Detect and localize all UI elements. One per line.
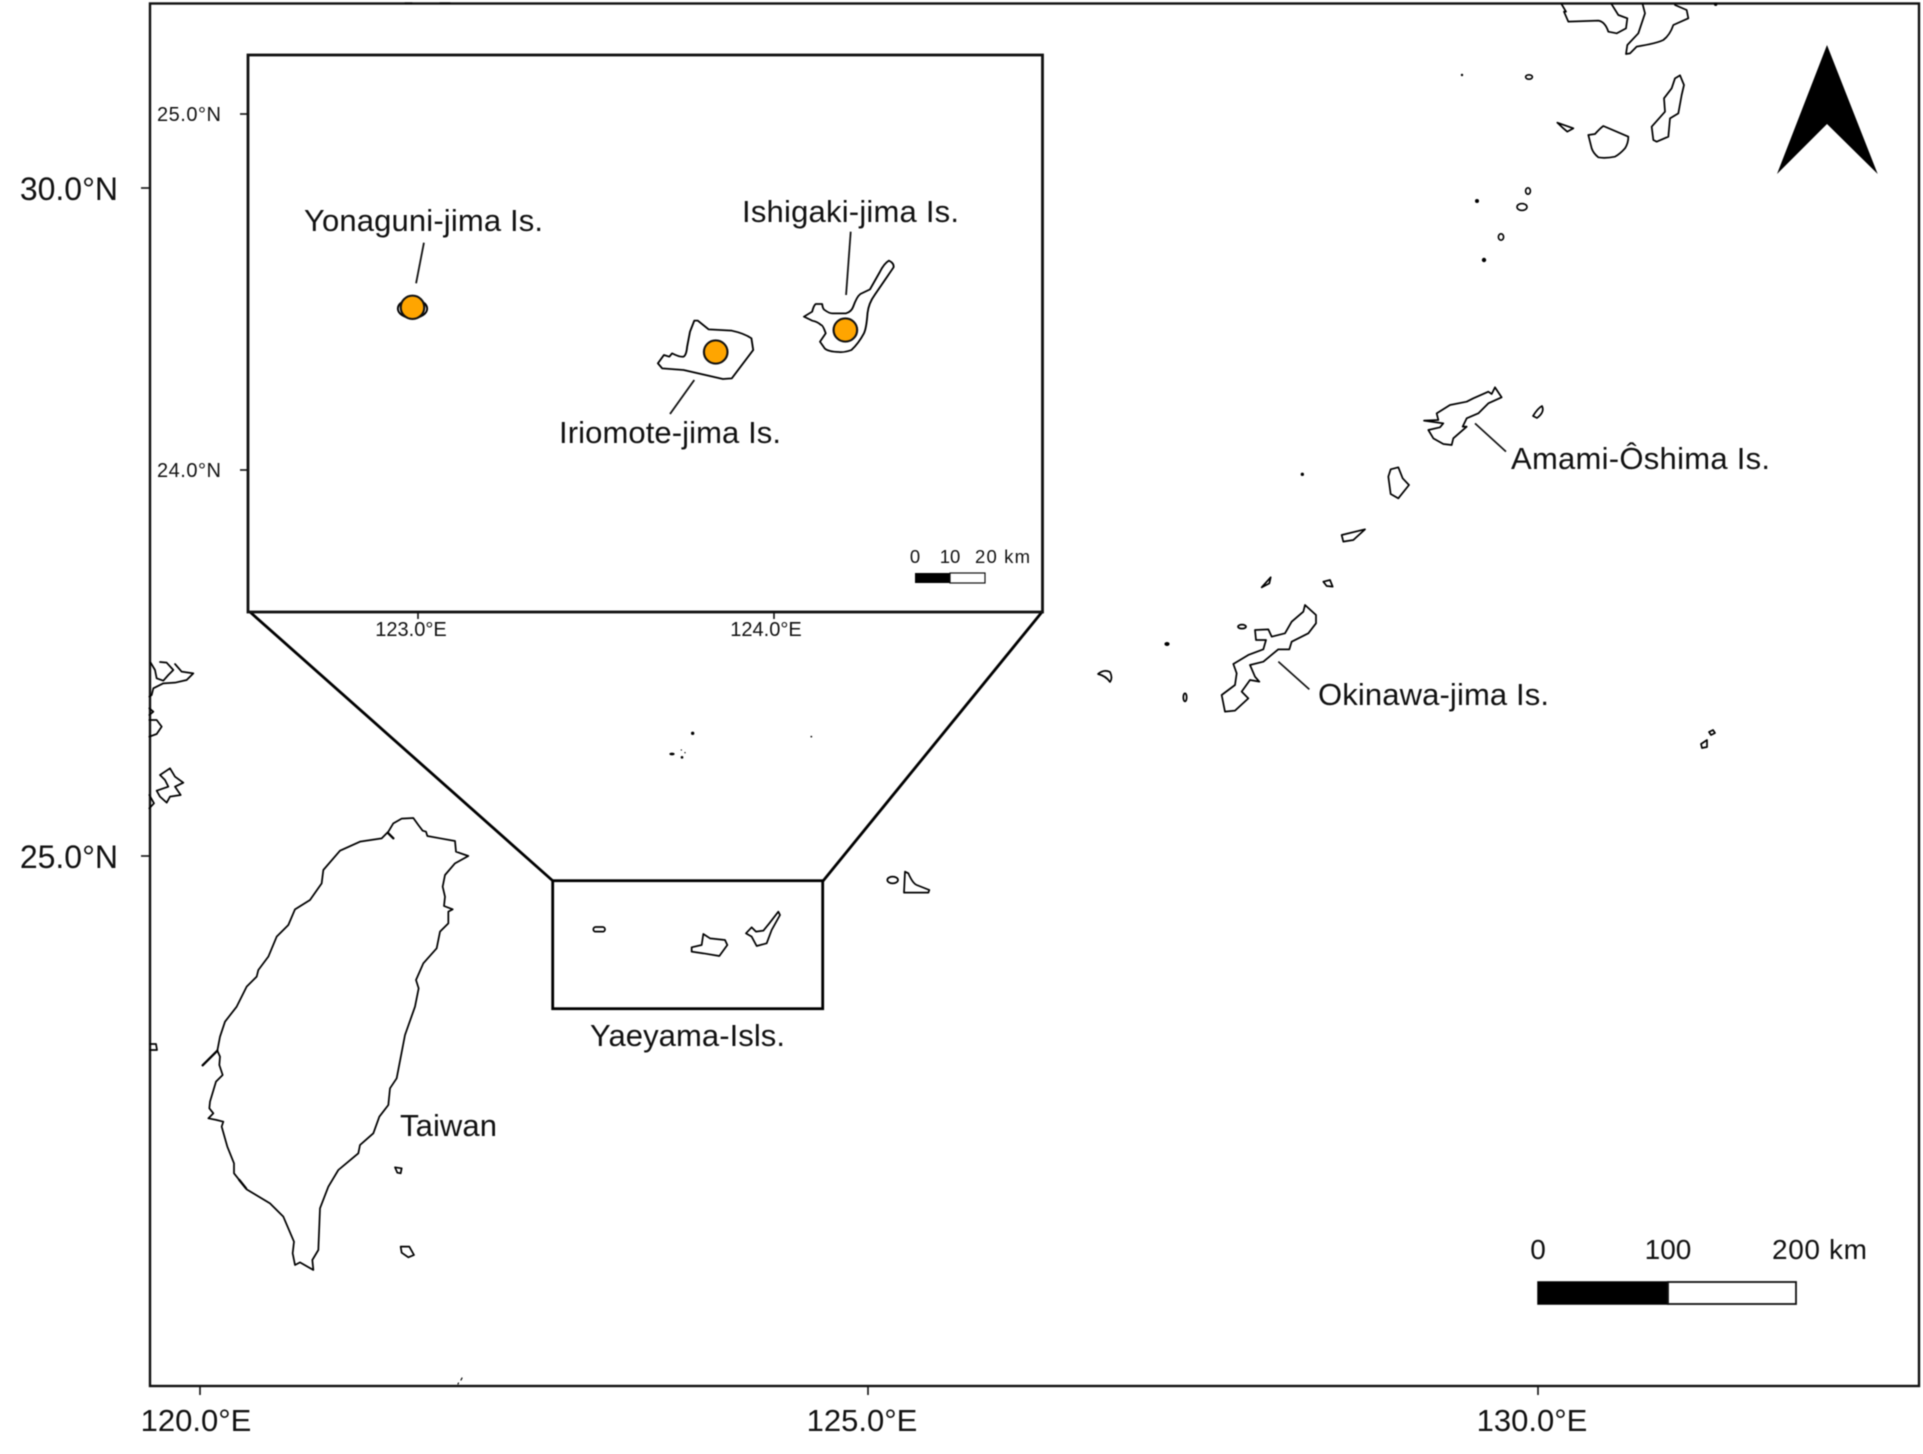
island: Okinawa-jima [1222,605,1316,712]
islands: Tokara group [1461,74,1532,262]
island: Kume [1183,693,1187,701]
leader line: Amami [1475,423,1506,452]
leader line: Okinawa [1278,662,1309,689]
islands: Kerama and small outliers [1098,406,1715,748]
label: Taiwan: Taiwan [400,1108,497,1143]
main scale bar: 0 [1530,1234,1546,1265]
inset latitude ticks and labels [157,104,248,482]
island: Yonaguni-jima [398,299,427,318]
islands: Senkaku dots [669,732,812,759]
label: Ishigaki-jima Is.: Ishigaki-jima Is. [742,194,959,229]
island: Tarama [887,877,898,883]
label: Yaeyama-Isls.: Yaeyama-Isls. [590,1018,785,1053]
site marker: Ishigaki [834,318,857,342]
inset scale bar: 20 km [975,546,1030,567]
islands: Yaeyama and Miyako on main map [593,732,929,956]
axis: latitude labels [20,171,150,875]
island: Amami-Oshima [1424,387,1502,445]
inset frame [248,55,1042,612]
islands: Kyushu and Osumi group [1557,3,1717,158]
leader lines [416,232,851,414]
main scale bar [1530,1234,1867,1304]
inset latitude ticks and labels: 25.0°N [157,104,221,126]
island: Miyako [904,872,929,893]
inset scale bar: 10 [940,546,960,567]
island: Iriomote-jima [658,321,753,379]
islands: small edge fragments [150,3,462,1384]
inset scale bar [910,546,1030,583]
axis: latitude labels: 30.0°N [20,171,118,207]
island: Iheya [1262,577,1271,587]
island: Taiwan [203,818,468,1270]
north arrow [1777,45,1878,174]
inset longitude ticks and labels: 124.0°E [730,619,802,641]
island: Iriomote small [692,934,727,956]
island: Tori-shima dot [1301,473,1304,476]
island: Okinoerabu [1342,529,1365,542]
islands: Okinawa and Amami group [1183,387,1506,712]
island: Yoron [1323,580,1333,587]
site marker: Iriomote [704,340,727,364]
site marker: Yonaguni [401,296,424,319]
island: Tokunoshima [1388,467,1409,498]
islands: mainland China coast fragments [149,662,193,808]
inset islands with study sites [398,232,894,414]
axis: longitude labels [141,1386,1587,1438]
island: Yonaguni small [593,927,605,932]
inset scale bar: 0 [910,546,920,567]
island: Aguni [1238,625,1246,629]
axis: longitude labels: 125.0°E [807,1403,917,1438]
inset latitude ticks and labels: 24.0°N [157,460,221,482]
island: Tanegashima [1652,75,1684,142]
island: Yakushima [1588,126,1628,158]
label: Yonaguni-jima Is.: Yonaguni-jima Is. [304,203,543,238]
axis: longitude labels: 130.0°E [1477,1403,1587,1438]
label: Amami-Oshima Is.: Amami-Ôshima Is. [1511,441,1770,476]
Yaeyama extent box [553,881,823,1009]
main scale bar: 200 km [1772,1234,1867,1265]
axis: latitude labels: 25.0°N [20,839,118,875]
inset longitude ticks and labels [375,612,802,641]
main scale bar: 100 [1645,1234,1691,1265]
inset longitude ticks and labels: 123.0°E [375,619,447,641]
island: Ishigaki small [746,912,780,946]
island: Ishigaki-jima [804,261,894,352]
axis: longitude labels: 120.0°E [141,1403,251,1438]
zoom connector lines [250,612,1042,881]
label: Iriomote-jima Is.: Iriomote-jima Is. [559,415,781,450]
island: Kuchinoerabu [1557,123,1573,132]
label: Okinawa-jima Is.: Okinawa-jima Is. [1318,677,1549,712]
inset panel: Yaeyama Islands [157,55,1042,641]
